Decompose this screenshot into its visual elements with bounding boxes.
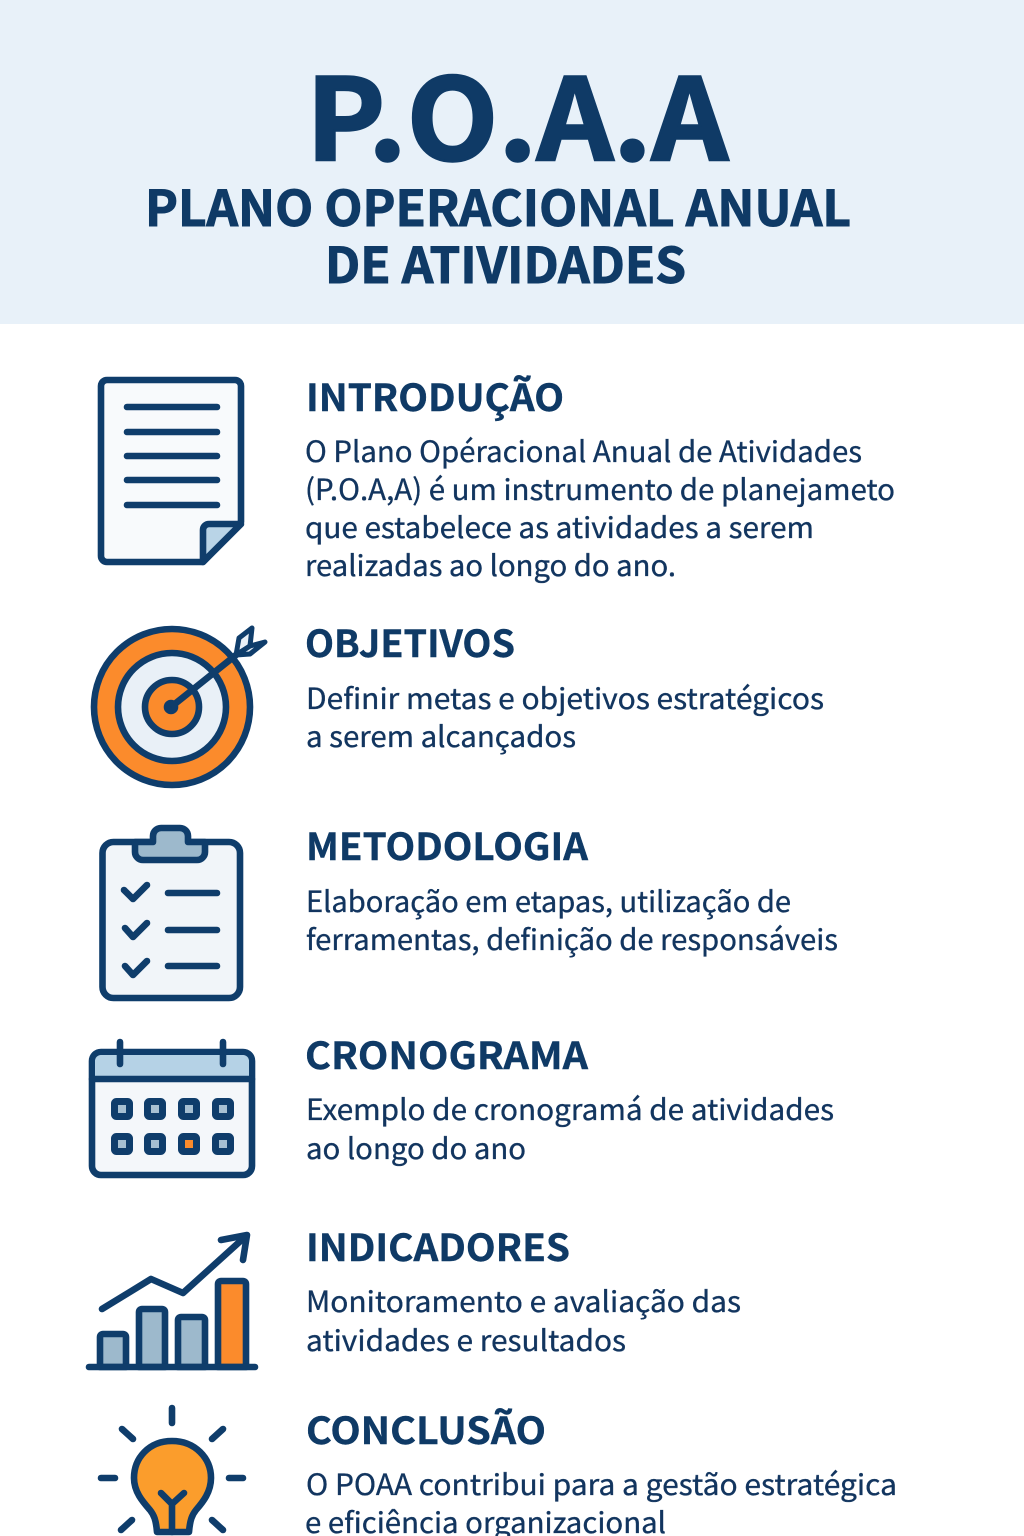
panel: metodologia: ferramentas, definição de responsáveis [306, 917, 838, 959]
panel: objetivos: Definir metas e objetivos estratégicos [306, 676, 824, 718]
subtitle: PLANO OPERACIONAL ANUAL [145, 170, 851, 241]
panel: introdução: realizadas ao longo do ano. [305, 543, 676, 585]
panel: conclusão: CONCLUSÃO [306, 1401, 546, 1455]
icon: calendar [92, 1042, 252, 1175]
panel: objetivos: OBJETIVOS [305, 614, 515, 668]
panel: cronograma: Exemplo de cronogramá de atividades [306, 1087, 834, 1129]
panel: metodologia [306, 817, 838, 959]
panel: cronograma [305, 1026, 834, 1168]
icon: target [94, 628, 265, 785]
panel: conclusão [305, 1401, 897, 1536]
panel: metodologia: Elaboração em etapas, utilização de [306, 879, 791, 921]
panel: introdução: (P.O.A,A) é um instrumento de planejameto [305, 467, 895, 509]
panel: introdução [305, 368, 895, 585]
panel: cronograma: ao longo do ano [306, 1126, 526, 1168]
icon: light bulb [101, 1408, 243, 1532]
panel: introdução: que estabelece as atividades a serem [305, 505, 814, 547]
panel: metodologia: METODOLOGIA [306, 817, 588, 871]
panel: indicadores: INDICADORES [306, 1218, 570, 1272]
title: P.O.A.A [306, 29, 729, 193]
subtitle: DE ATIVIDADES [325, 227, 686, 298]
panel: introdução: INTRODUÇÃO [306, 368, 564, 422]
icon: clipboard checklist [102, 828, 240, 998]
panel: indicadores: Monitoramento e avaliação das [306, 1279, 741, 1321]
header band [0, 0, 1024, 324]
panel: objetivos: a serem alcançados [306, 714, 576, 756]
panel: cronograma: CRONOGRAMA [305, 1026, 588, 1080]
icon: growth chart [89, 1235, 255, 1367]
panel: conclusão: O POAA contribui para a gestão estratégica [306, 1462, 897, 1504]
icon: document [101, 380, 241, 562]
panel: indicadores [306, 1218, 741, 1360]
subtitle [145, 170, 851, 298]
panel: introdução: O Plano Opéracional Anual de Atividades [305, 429, 862, 471]
panel: objetivos [305, 614, 824, 756]
panel: indicadores: atividades e resultados [306, 1318, 626, 1360]
